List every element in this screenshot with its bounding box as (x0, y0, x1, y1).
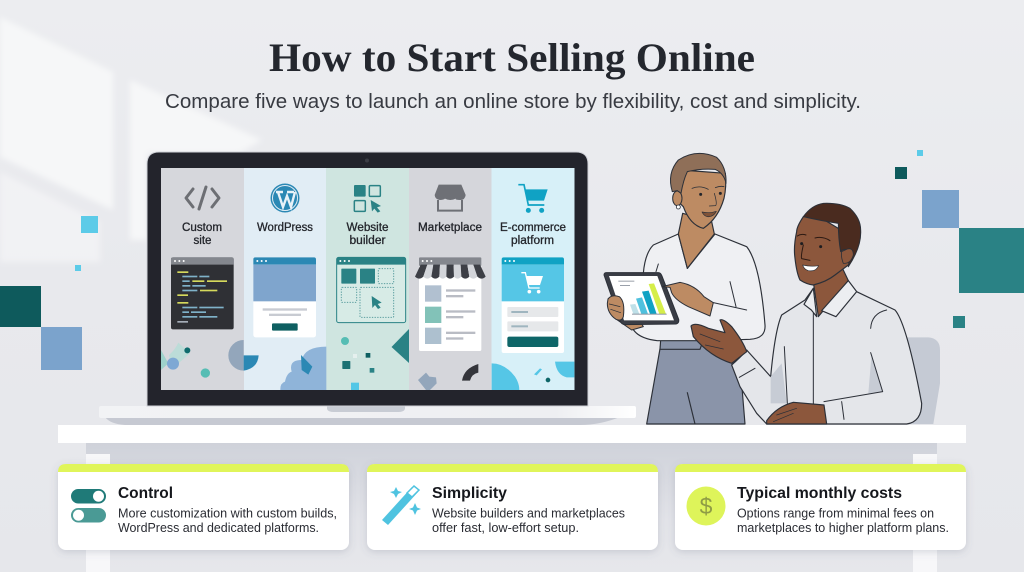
label: custom site: site (194, 235, 212, 247)
text: simplicity: Website builders and marketplaces (432, 506, 625, 520)
icon: dollar coin: $ (700, 493, 713, 519)
table legs (86, 454, 937, 572)
tablet (604, 273, 713, 330)
text: typical monthly costs: Options range from minimal fees on (737, 506, 934, 520)
heading: simplicity: Simplicity (432, 485, 507, 502)
label: wordpress: WordPress (257, 222, 313, 234)
decorative squares: right (895, 150, 1024, 328)
decorative shapes (492, 362, 574, 390)
column: custom site (161, 187, 244, 378)
mockup: page builder (337, 257, 406, 323)
label: e-commerce platform: platform (511, 235, 554, 247)
laptop bezel (147, 152, 588, 406)
text: simplicity: offer fast, low-effort setup. (432, 521, 579, 535)
mockup: storefront page (415, 257, 486, 351)
screen columns (161, 168, 574, 390)
label: website builder: Website (346, 222, 388, 234)
text: typical monthly costs: marketplaces to higher platform plans. (737, 521, 949, 535)
table underside shadow (86, 443, 937, 572)
heading: control: Control (118, 485, 173, 502)
decorative triangle (392, 329, 409, 363)
mockup: wordpress page (253, 257, 316, 337)
chair (905, 337, 940, 424)
panel: control (58, 464, 349, 550)
column: e-commerce platform (492, 185, 574, 390)
panel: typical monthly costs (675, 464, 966, 550)
icon: toggles (71, 489, 106, 522)
decorative shapes (418, 364, 478, 390)
column: wordpress (244, 184, 326, 390)
label: e-commerce platform: E-commerce (500, 222, 566, 234)
decorative shapes (341, 337, 374, 390)
label: website builder: builder (350, 235, 386, 247)
icon: builder blocks (354, 185, 381, 213)
column: marketplace (415, 185, 486, 390)
icon: shopping cart (518, 185, 548, 213)
subtitle: Compare five ways to launch an online store by flexibility, cost and simplicity. (165, 91, 861, 113)
panel: simplicity (367, 464, 658, 550)
label: marketplace: Marketplace (418, 222, 482, 234)
text: control: More customization with custom builds, (118, 506, 337, 520)
icon: storefront (435, 185, 466, 211)
text: control: WordPress and dedicated platforms. (118, 521, 319, 535)
icon: wordpress logo (270, 184, 300, 212)
mockup: checkout page (502, 257, 564, 353)
label: custom site: Custom (182, 222, 222, 234)
decorative shapes (244, 347, 326, 390)
woman (632, 153, 765, 424)
decorative shapes (161, 340, 244, 378)
column: website builder (337, 185, 409, 390)
man (691, 203, 922, 424)
title: How to Start Selling Online (269, 35, 755, 80)
laptop base (99, 406, 636, 425)
illustration: people (604, 153, 940, 424)
icon: dollar coin (686, 486, 726, 526)
icon: magic wand (382, 486, 421, 525)
decorative squares: left (0, 216, 98, 370)
laptop (99, 152, 636, 425)
heading: typical monthly costs: Typical monthly costs (737, 485, 902, 502)
table top (58, 425, 966, 443)
icon: code brackets (186, 187, 219, 209)
mockup: code editor (171, 257, 234, 329)
